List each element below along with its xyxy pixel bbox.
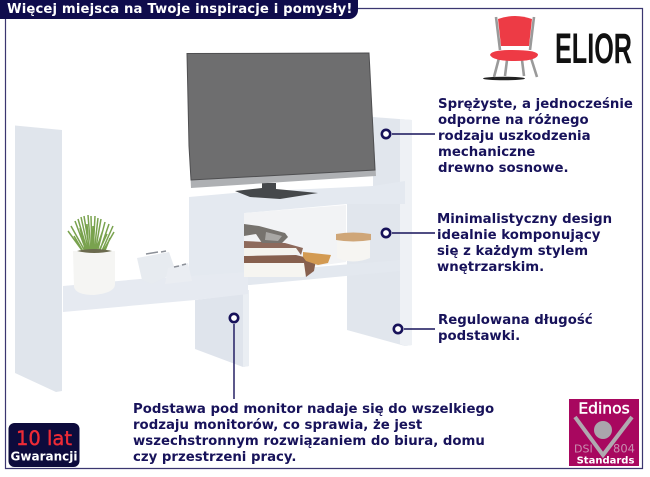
text: length [438,313,593,344]
text: description: rodzaju monitorów, co sprawia, że jest [133,418,422,433]
screen [187,53,375,180]
Edinos badge: DSI [574,442,593,456]
warranty badge: Gwarancji [11,450,77,464]
cards [137,252,176,284]
Edinos badge: 804 [613,442,635,456]
books and glasses [244,224,331,277]
Edinos badge: Edinos [578,400,630,418]
text: material: rodzaju uszkodzenia [438,129,591,144]
stand [235,183,318,199]
middle shelf [243,260,400,285]
jar [336,232,371,262]
text: description: czy przestrzeni pracy. [133,450,296,465]
plant [68,215,115,295]
Edinos badge: Standards [577,456,634,466]
orange strap [303,252,331,265]
text: material: mechaniczne [438,145,535,160]
text: description: wszechstronnym rozwiązaniem do biura, domu [133,434,485,449]
top book [244,247,298,256]
text: design: idealnie komponujący [437,228,600,243]
pot [73,251,115,295]
back wall of opening [244,205,346,276]
shelf furniture [15,117,412,392]
glasses [244,224,288,243]
small desk items [137,251,192,284]
text: material: odporne na różnego [438,113,589,128]
warranty badge: 10 lat [16,427,72,450]
text: design: się z każdym stylem [437,244,588,259]
text: length: podstawki. [438,329,520,344]
text: description [133,402,494,465]
text: material [438,97,633,176]
text: description: Podstawa pod monitor nadaje się do wszelkiego [133,402,494,417]
text: length: Regulowana długość [438,313,593,328]
lower shelf [63,272,248,312]
warranty badge [8,423,80,467]
text: design: Minimalistyczny design [437,212,612,227]
bottom book [244,262,312,277]
centre leg [195,294,249,367]
monitor [187,53,376,199]
Edinos badge [569,399,639,466]
callout lines [234,134,435,399]
text: design: wnętrzarskim. [437,260,544,275]
left upright [15,126,62,392]
right upright [347,117,412,346]
leaves [68,215,114,253]
text: material: Sprężyste, a jednocześnie [438,97,633,112]
text: material: drewno sosnowe. [438,161,569,176]
bezel [187,53,376,188]
text: design [437,212,612,275]
chair logo [483,16,538,80]
callout markers [230,130,402,333]
title banner: Więcej miejsca na Twoje inspiracje i pomysły! [7,2,353,17]
upper shelf and block [189,181,405,285]
